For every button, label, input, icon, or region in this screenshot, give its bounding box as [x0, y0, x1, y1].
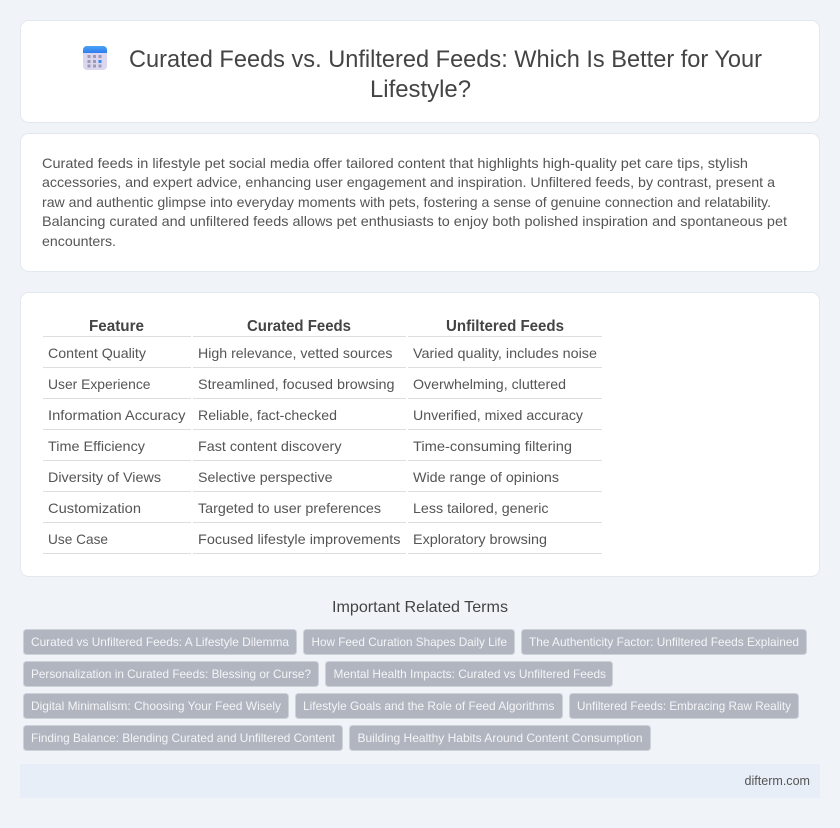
- text block: description: raw and authentic glimpse into everyday moments with pets, fostering a sense of genuine connection and relatability.: [42, 194, 771, 210]
- table row: diversity of views: [48, 469, 559, 485]
- heading: related terms: Important Related Terms: [332, 599, 508, 616]
- text block: description: Balancing curated and unfiltered feeds allows pet enthusiasts to enjoy both polished inspiration and spontaneous pet: [42, 213, 787, 229]
- table row: user experience: Streamlined, focused browsing: [198, 376, 394, 392]
- tag: [570, 694, 798, 718]
- tag: Personalization in Curated Feeds: Blessing or Curse?: [31, 667, 311, 681]
- tag: [304, 630, 514, 654]
- tag: [296, 694, 562, 718]
- table row: content quality: High relevance, vetted sources: [198, 345, 392, 361]
- table row: diversity of views: Wide range of opinions: [413, 469, 559, 485]
- table header: Unfiltered Feeds: [446, 318, 564, 335]
- table row: content quality: [48, 345, 597, 361]
- text block: description: [42, 155, 787, 249]
- tag: The Authenticity Factor: Unfiltered Feeds Explained: [529, 635, 799, 649]
- tag: [24, 726, 342, 750]
- tag: Mental Health Impacts: Curated vs Unfiltered Feeds: [334, 667, 606, 681]
- table row: information accuracy: Reliable, fact-checked: [198, 407, 337, 423]
- tag: Building Healthy Habits Around Content Consumption: [358, 731, 642, 745]
- title: Curated Feeds vs. Unfiltered Feeds: Which Is Better for Your: [129, 46, 762, 73]
- tag: [24, 630, 296, 654]
- table row: customization: Less tailored, generic: [413, 500, 548, 516]
- text block: description: encounters.: [42, 233, 116, 249]
- table row: time efficiency: Fast content discovery: [198, 438, 342, 454]
- tag: [24, 662, 318, 686]
- tag: How Feed Curation Shapes Daily Life: [312, 635, 507, 649]
- title: [129, 46, 762, 103]
- table row: customization: Customization: [48, 500, 141, 516]
- table header: Curated Feeds: [247, 318, 351, 335]
- tag: Lifestyle Goals and the Role of Feed Algorithms: [303, 699, 554, 713]
- tag: Finding Balance: Blending Curated and Unfiltered Content: [31, 731, 336, 745]
- footer: difterm.com: [744, 773, 810, 788]
- table row: user experience: User Experience: [48, 376, 151, 392]
- table row: time efficiency: Time-consuming filtering: [413, 438, 572, 454]
- icon: calendar: [83, 46, 107, 70]
- table row: user experience: [48, 376, 566, 392]
- table row: time efficiency: Time Efficiency: [48, 438, 145, 454]
- panel: intro text: [20, 134, 820, 272]
- panel: related term tags: [24, 630, 806, 750]
- table row: content quality: Varied quality, includes noise: [413, 345, 597, 361]
- table row: content quality: Content Quality: [48, 345, 146, 361]
- footer: [20, 764, 820, 798]
- tag: Digital Minimalism: Choosing Your Feed Wisely: [31, 699, 281, 713]
- table row: diversity of views: Selective perspective: [198, 469, 333, 485]
- table row: diversity of views: Diversity of Views: [48, 469, 161, 485]
- text block: description: Curated feeds in lifestyle pet social media offer tailored content that highlights high-quality pet care tips, stylish: [42, 155, 748, 171]
- table row: use case: Use Case: [48, 531, 108, 547]
- table row: information accuracy: Unverified, mixed accuracy: [413, 407, 583, 423]
- table header: Feature: [89, 318, 144, 335]
- panel: comparison table: [20, 292, 820, 576]
- table row: use case: Focused lifestyle improvements: [198, 531, 400, 547]
- tag: [350, 726, 650, 750]
- table row: use case: [48, 531, 547, 547]
- table row: information accuracy: [48, 407, 583, 423]
- tag: [522, 630, 806, 654]
- table row: time efficiency: [48, 438, 572, 454]
- table header: [89, 318, 564, 335]
- tag: [24, 694, 288, 718]
- tag: [326, 662, 612, 686]
- table row: user experience: Overwhelming, cluttered: [413, 376, 566, 392]
- table row: information accuracy: Information Accuracy: [48, 407, 186, 423]
- table row: customization: [48, 500, 548, 516]
- table row: use case: Exploratory browsing: [413, 531, 547, 547]
- tag: Unfiltered Feeds: Embracing Raw Reality: [577, 699, 791, 713]
- title: Lifestyle?: [370, 76, 471, 103]
- table row: customization: Targeted to user preferences: [198, 500, 381, 516]
- panel: header: [20, 20, 820, 122]
- tag: Curated vs Unfiltered Feeds: A Lifestyle Dilemma: [31, 635, 289, 649]
- text block: description: accessories, and expert advice, enhancing user engagement and inspiration. Unfiltered feeds, by contrast, present a: [42, 174, 775, 190]
